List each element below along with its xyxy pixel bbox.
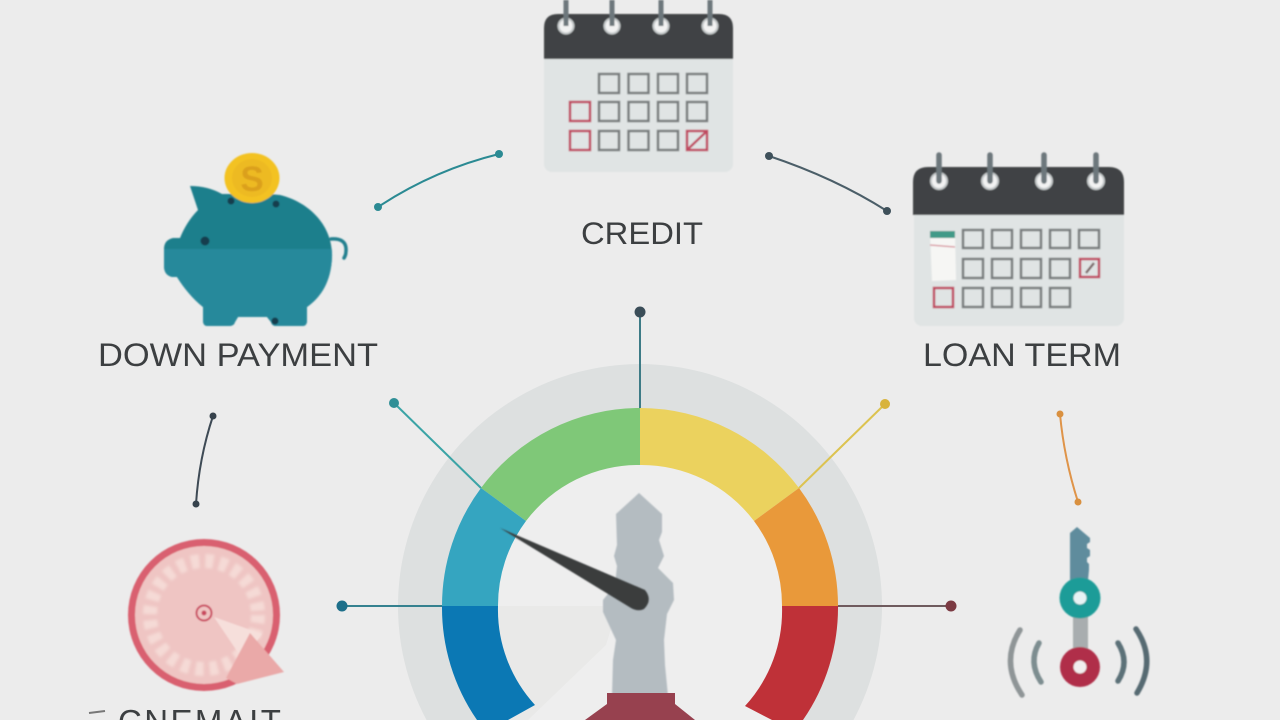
key silhouette — [603, 493, 674, 696]
gauge segment: yellow — [640, 408, 799, 521]
heading: loan term: LOAN TERM — [923, 337, 1121, 373]
gauge inner fill — [465, 431, 815, 720]
gauge segment: orange — [754, 488, 838, 606]
connector: loan term to key — [1056, 410, 1082, 506]
gauge tick: upper right — [799, 399, 890, 488]
key head — [585, 693, 695, 720]
torn calendar note — [930, 231, 956, 281]
gauge tick: top — [634, 306, 646, 408]
small dash beside label — [89, 711, 105, 713]
needle — [500, 528, 649, 610]
icon: key with signal waves — [1010, 527, 1147, 695]
icon: piggy bank — [164, 153, 346, 326]
gauge segment: blue — [442, 606, 535, 720]
gauge segment: red — [745, 606, 838, 720]
gauge segment: green — [481, 408, 640, 521]
heading: down payment: DOWN PAYMENT — [98, 337, 378, 373]
connectors — [192, 150, 1082, 612]
connector: credit to loan term — [765, 152, 891, 215]
gauge tick: right — [838, 600, 956, 612]
connector: piggy to credit — [374, 150, 503, 211]
panel: loan term calendar — [913, 155, 1124, 326]
gauge — [398, 364, 882, 720]
icon: gold coin: S — [240, 160, 264, 199]
gauge tick: left — [336, 600, 442, 612]
gauge outer ring — [398, 364, 882, 720]
icon: gold coin — [224, 153, 280, 203]
heading: credit: CREDIT — [581, 215, 703, 251]
icon: pink dial — [128, 539, 284, 691]
connector: down payment to dial — [192, 412, 216, 508]
gauge inner shade — [490, 606, 618, 720]
gauge tick: upper left — [389, 398, 481, 488]
panel: credit calendar — [544, 0, 733, 172]
gauge segment: teal — [442, 488, 526, 606]
